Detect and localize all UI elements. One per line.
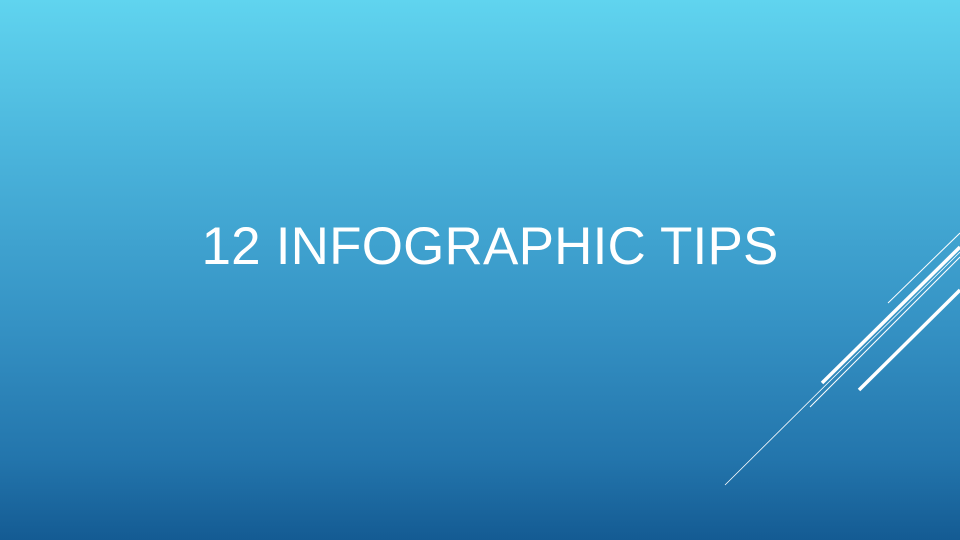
title: 12 INFOGRAPHIC TIPS — [201, 217, 779, 276]
